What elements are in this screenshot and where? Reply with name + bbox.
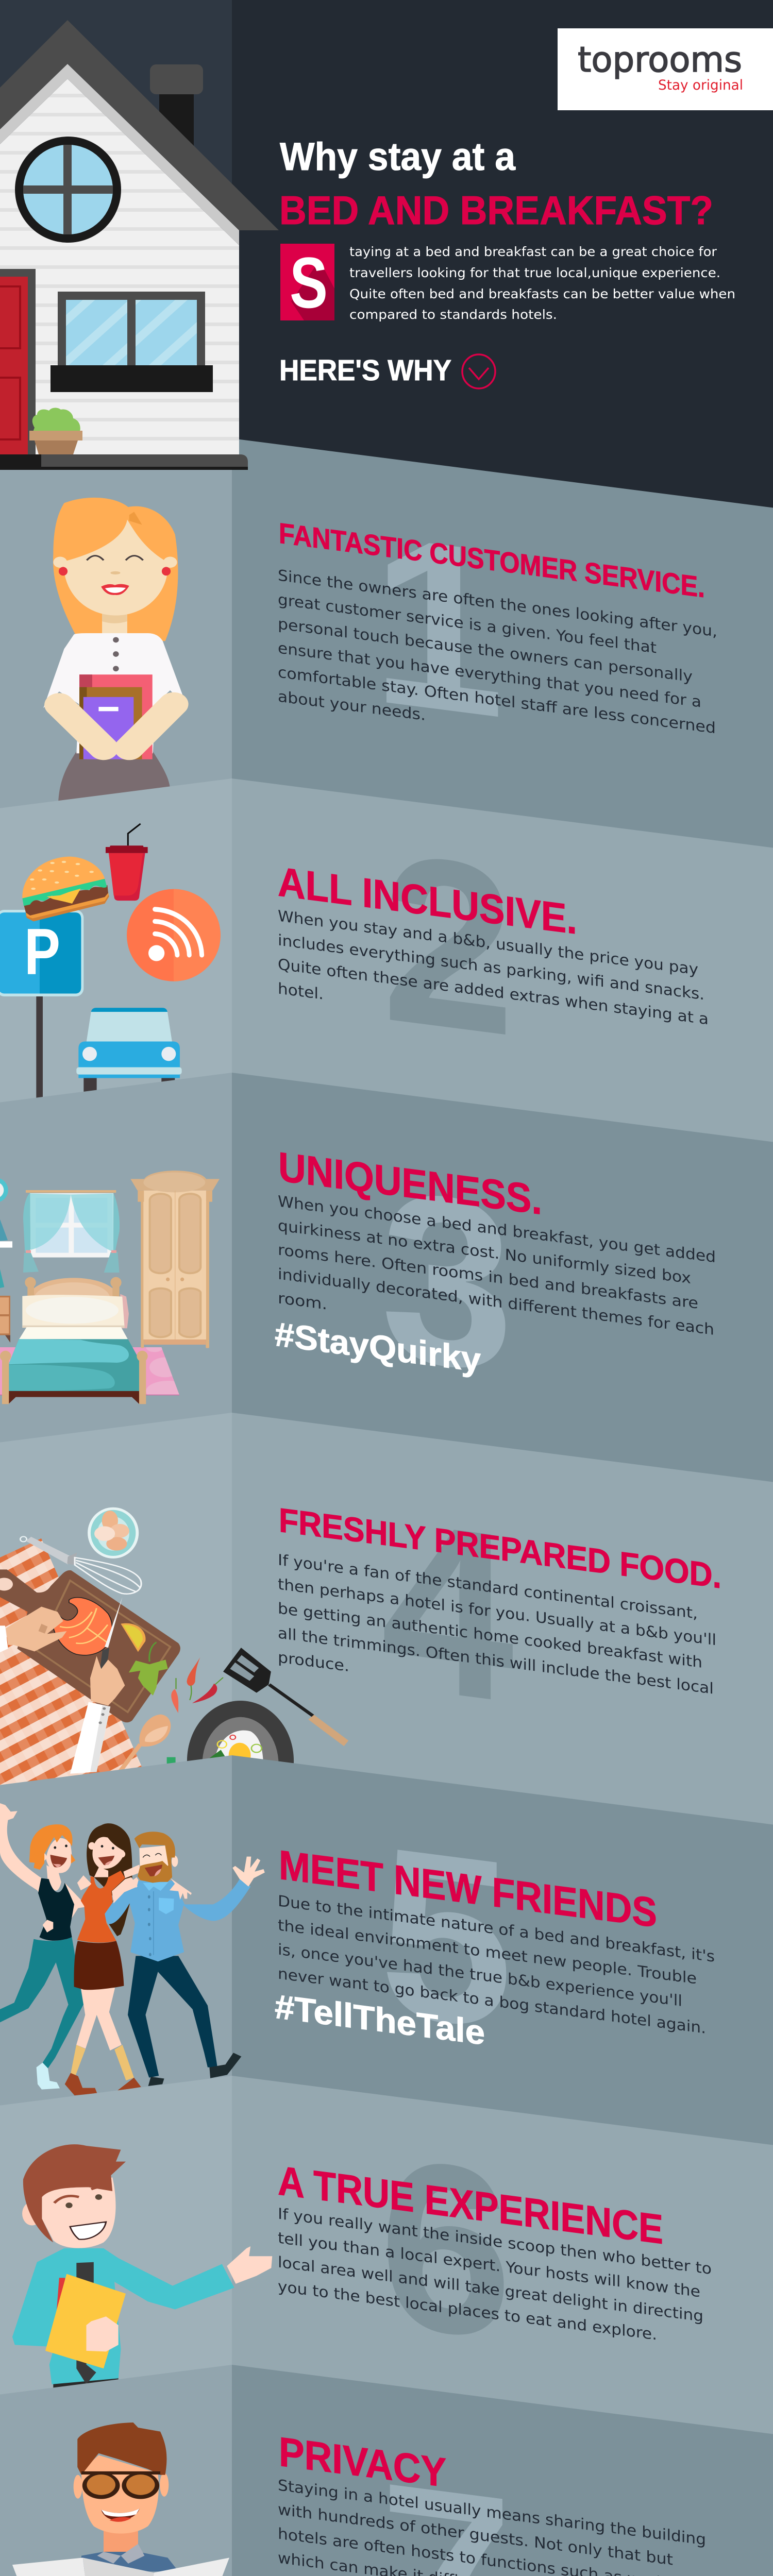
body 2: When you stay and a b&b, usually the price you pay xyxy=(278,907,698,978)
herb leaf xyxy=(129,1642,168,1696)
chillies xyxy=(171,1657,223,1713)
logo: toprooms xyxy=(558,28,773,110)
icon: car xyxy=(76,1008,182,1098)
whisk xyxy=(20,1536,141,1594)
body 5: is, once you've had the true b&b experience you'll xyxy=(278,1941,682,2010)
right hand and sleeve xyxy=(70,1656,125,1774)
illustration: man with folder xyxy=(12,2144,272,2396)
illustration: parking, food, wifi, car xyxy=(0,824,221,1110)
body 7 xyxy=(278,2477,710,2576)
body 6: tell you than a local expert. Your hosts will know the xyxy=(278,2229,700,2300)
heading 4: FRESHLY PREPARED FOOD. xyxy=(279,1501,721,1596)
body 4 xyxy=(278,1551,716,1722)
friend: middle woman xyxy=(65,1827,141,2095)
band 7 wall: privacy xyxy=(0,2365,773,2576)
body 2 xyxy=(278,907,709,1052)
friend: bearded man body xyxy=(104,1857,265,2086)
intro text xyxy=(349,244,735,322)
body 2: hotel. xyxy=(278,980,324,1003)
body 1: ensure that you have everything that you need for a xyxy=(278,639,701,711)
illustration: woman with books xyxy=(43,498,188,807)
band 4 wall: freshly prepared food xyxy=(0,1413,773,2576)
body 3: room. xyxy=(278,1290,327,1313)
text panel 2 xyxy=(278,788,709,1111)
band: header background xyxy=(0,0,773,515)
illustration: man reading a map xyxy=(12,2422,229,2576)
hashtag TellTheTale: #TellTheTale xyxy=(275,1988,485,2053)
body 2: Quite often these are added extras when staying at a xyxy=(278,956,709,1028)
body 4: all the trimmings. Often this will include the best local xyxy=(278,1624,714,1698)
body 4: be getting an authentic home cooked breakfast with xyxy=(278,1600,702,1671)
numeral 1: 1 xyxy=(372,483,505,768)
body 5: Due to the intimate nature of a bed and breakfast, it's xyxy=(278,1892,715,1965)
numeral 6: 6 xyxy=(379,2106,512,2391)
heading 5: MEET NEW FRIENDS xyxy=(279,1842,657,1937)
title: why stay: Why stay at a xyxy=(280,135,516,179)
heading 2: ALL INCLUSIVE. xyxy=(278,859,577,943)
band 3 wall: uniqueness xyxy=(0,1073,773,2576)
house siding xyxy=(0,79,239,454)
body 5 xyxy=(278,1892,715,2038)
friend: bearded man head xyxy=(130,1832,192,1900)
body 4: then perhaps a hotel is for you. Usually at a b&b you'll xyxy=(278,1575,716,1649)
icon: chevron circle xyxy=(462,354,495,388)
title: why stay xyxy=(279,135,713,233)
lemon xyxy=(121,1623,146,1652)
numeral 3: 3 xyxy=(381,1139,514,1423)
logo: toprooms: Stay original xyxy=(658,77,743,93)
heading 1: FANTASTIC CUSTOMER SERVICE. xyxy=(279,517,705,604)
icon: house with red door xyxy=(0,20,279,470)
body 1: comfortable stay. Often hotel staff are less concerned xyxy=(278,664,716,737)
drop cap: S: S xyxy=(290,242,328,323)
body 2: includes everything such as parking, wifi and snacks. xyxy=(278,931,704,1003)
hashtag StayQuirky: #StayQuirky xyxy=(275,1315,481,1380)
salmon xyxy=(53,1598,112,1655)
knife xyxy=(99,1597,122,1674)
body 6: you to the best local places to eat and explore. xyxy=(278,2278,657,2344)
house roof xyxy=(0,20,279,245)
body 3: quirkiness at no extra cost. No uniformly sized box xyxy=(278,1217,691,1287)
text panel 1 xyxy=(278,471,717,795)
body 7: with hundreds of other guests. Not only that but xyxy=(278,2501,673,2569)
illustration: three friends xyxy=(0,1803,265,2095)
body 1: Since the owners are often the ones looking after you, xyxy=(278,567,717,640)
intro text: travellers looking for that true local,unique experience. xyxy=(349,265,720,280)
spatula xyxy=(223,1648,348,1746)
body 5: never want to go back to a bog standard hotel again. xyxy=(278,1965,706,2037)
clock and shelf xyxy=(0,1178,12,1288)
band 6 wall: a true experience xyxy=(0,2076,773,2576)
body 3: When you choose a bed and breakfast, you get added xyxy=(278,1193,716,1266)
friend: left woman xyxy=(0,1803,85,2090)
text panel 4 xyxy=(278,1455,721,1780)
house plant xyxy=(29,408,82,454)
text panel 5 xyxy=(275,1782,715,2106)
body 5: the ideal environment to meet new people. Trouble xyxy=(278,1917,697,1988)
body 3: rooms here. Often rooms in bed and breakfasts are xyxy=(278,1241,698,1312)
icon: wifi xyxy=(127,889,221,981)
cutting board xyxy=(0,1569,180,1722)
heading 7: PRIVACY xyxy=(279,2429,446,2496)
body 4: If you're a fan of the standard continental croissant, xyxy=(278,1551,698,1622)
wardrobe xyxy=(130,1171,220,1348)
body 1: personal touch because the owners can personally xyxy=(278,615,693,685)
title: why stay: BED AND BREAKFAST? xyxy=(279,188,713,233)
icon: drink xyxy=(106,824,148,901)
intro text: compared to standards hotels. xyxy=(349,307,557,322)
heading: here's why: HERE'S WHY xyxy=(279,354,451,387)
numeral 5: 5 xyxy=(380,1795,513,2080)
friend: long hair back xyxy=(87,1823,132,1936)
body 6: local area well and will take great delight in directing xyxy=(278,2253,703,2325)
body 1: about your needs. xyxy=(278,688,426,724)
body 3 xyxy=(278,1193,716,1363)
body 1: great customer service is a given. You feel that xyxy=(278,591,657,657)
left hand xyxy=(0,1607,66,1652)
house door xyxy=(0,269,36,454)
text panel 3 xyxy=(275,1125,716,1449)
house round window xyxy=(15,137,121,243)
house window xyxy=(51,292,213,392)
plate of eggs xyxy=(88,1507,139,1558)
intro text: Quite often bed and breakfasts can be better value when xyxy=(349,286,735,301)
logo: toprooms: toprooms xyxy=(578,40,742,80)
heading 6: A TRUE EXPERIENCE xyxy=(278,2158,663,2253)
band 5 wall: meet new friends xyxy=(0,1755,773,2576)
body 7: Staying in a hotel usually means sharing the building xyxy=(278,2477,706,2549)
numeral 2: 2 xyxy=(382,802,515,1087)
body 4: produce. xyxy=(278,1649,349,1675)
rug xyxy=(0,1347,179,1395)
tablecloth xyxy=(0,1538,142,1803)
body 3: individually decorated, with different themes for each xyxy=(278,1265,714,1338)
heading 3: UNIQUENESS. xyxy=(278,1144,542,1224)
text panel 6 xyxy=(278,2093,712,2416)
intro text: taying at a bed and breakfast can be a great choice for xyxy=(349,244,717,259)
body 1 xyxy=(278,567,717,761)
icon: burger xyxy=(22,857,109,921)
illustration: food preparation xyxy=(0,1507,348,1821)
body 6 xyxy=(278,2205,712,2350)
band 2 wall: all inclusive xyxy=(0,778,773,2576)
body 6: If you really want the inside scoop then who better to xyxy=(278,2205,712,2278)
illustration: bedroom xyxy=(0,1171,220,1404)
nightstand xyxy=(0,1296,10,1343)
house chimney xyxy=(150,64,203,151)
text panel 7 xyxy=(275,2417,710,2576)
frying pan xyxy=(167,1701,294,1821)
numeral 4: 4 xyxy=(381,1468,515,1753)
parking letter: P xyxy=(24,915,60,988)
house step xyxy=(0,454,248,470)
bed xyxy=(0,1277,148,1404)
wooden spoon xyxy=(120,1715,171,1772)
room window with curtains xyxy=(23,1190,120,1273)
icon: parking sign xyxy=(0,910,83,1110)
